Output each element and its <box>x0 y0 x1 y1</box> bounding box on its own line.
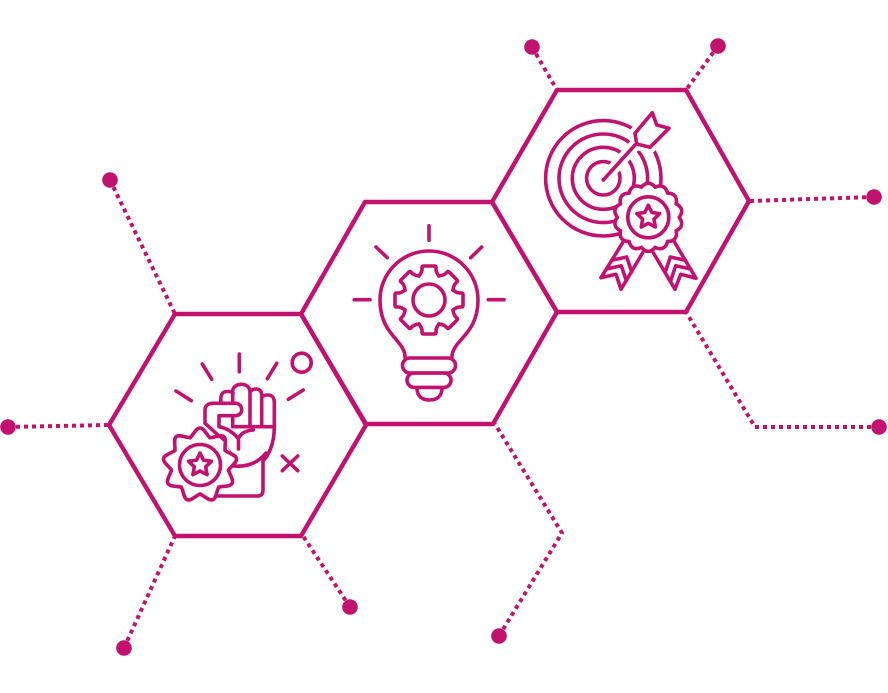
bulb glass <box>380 251 478 357</box>
rosette badge <box>162 428 238 503</box>
connector: right <box>749 197 874 201</box>
connector: bottom left <box>124 536 175 648</box>
bulb tip <box>417 388 442 400</box>
icon: light bulb with gear <box>354 226 504 400</box>
award rosette <box>614 183 683 251</box>
gear <box>395 266 463 334</box>
icon: raised fist with badge <box>162 353 311 503</box>
connector: top left <box>110 180 175 314</box>
small cross <box>282 456 298 471</box>
bulb rays <box>354 226 504 300</box>
target rings <box>546 121 661 236</box>
bulb base <box>402 358 456 373</box>
small circle <box>292 353 311 372</box>
right ribbon <box>653 240 696 289</box>
icon: target with arrow and award ribbon <box>546 113 696 289</box>
connector: top right <box>686 46 718 90</box>
fist rays <box>176 354 303 401</box>
arrow gap mask <box>606 113 669 177</box>
arrow <box>603 113 669 180</box>
connector: bottom centre elbow <box>495 424 562 636</box>
fist and wrist <box>205 384 274 496</box>
hexagon: left <box>109 314 366 536</box>
connector: top centre <box>532 47 557 90</box>
hexagon: centre <box>301 202 557 424</box>
bulb base lower <box>407 373 451 387</box>
hexagon: right <box>492 90 749 312</box>
connector: far left <box>8 425 109 427</box>
connector: bottom middle left <box>303 536 350 607</box>
connector: lower right elbow <box>686 312 879 427</box>
left ribbon <box>601 242 643 289</box>
